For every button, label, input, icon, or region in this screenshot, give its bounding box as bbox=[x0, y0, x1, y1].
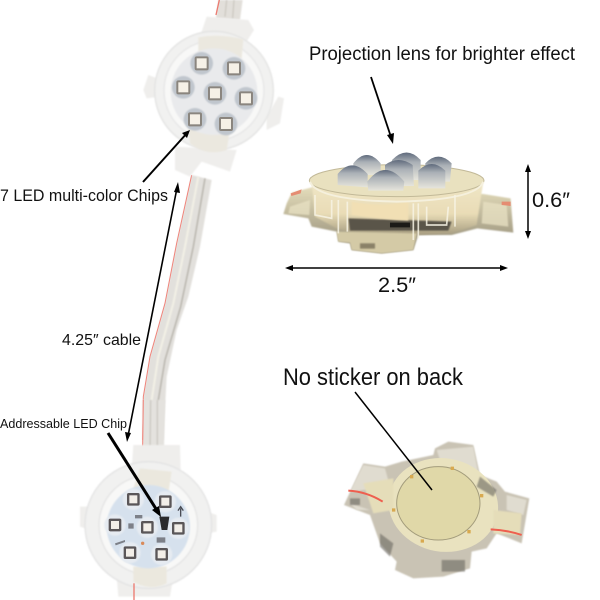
cable: ribbon between modules bbox=[143, 175, 212, 440]
photo: bottom LED module bbox=[80, 400, 217, 600]
module: beige board strips bbox=[132, 468, 172, 587]
side: base outline with flanges bbox=[283, 187, 513, 253]
LED chips bbox=[172, 52, 257, 135]
cable: top stub bbox=[216, 0, 243, 20]
side: housing ribs bbox=[315, 195, 455, 240]
addressable chip bbox=[159, 517, 169, 530]
label: addressable chip: Addressable LED Chip bbox=[0, 416, 127, 431]
small parts on board bbox=[115, 515, 165, 545]
label: LED chips: 7 LED multi-color Chips bbox=[0, 186, 168, 205]
back: dots bbox=[392, 467, 483, 543]
side: base front bbox=[337, 232, 417, 253]
back: clear housing outline bbox=[344, 442, 529, 578]
arrow: double-headed cable length bbox=[125, 182, 180, 442]
back: dark housing patches bbox=[350, 477, 497, 572]
arrow: height dimension bbox=[525, 164, 531, 239]
side: body bbox=[312, 182, 483, 235]
label: width: 2.5″ bbox=[378, 274, 417, 297]
side: top disc bbox=[309, 165, 484, 197]
arrow: addressable chip pointer bbox=[108, 433, 161, 517]
module: clear round housing bbox=[155, 31, 273, 150]
arrow: no sticker pointer bbox=[355, 392, 432, 490]
label: cable length: 4.25″ cable bbox=[62, 332, 141, 349]
module: clear round housing bbox=[85, 462, 212, 588]
module: housing tabs bbox=[143, 17, 284, 177]
cable: entry into bottom module bbox=[143, 400, 165, 450]
side: orange cream band bbox=[352, 202, 408, 221]
photo: back view of module bbox=[344, 442, 529, 578]
label: projection lens: Projection lens for brighter effect bbox=[309, 44, 576, 65]
side: flange glints bbox=[288, 200, 508, 227]
label: height: 0.6″ bbox=[532, 189, 571, 212]
back: cream disc base bbox=[381, 449, 506, 560]
label: no sticker: No sticker on back bbox=[283, 364, 464, 391]
arrow: 7 LED chips pointer bbox=[143, 130, 190, 182]
board direction mark bbox=[178, 507, 183, 517]
side: dark interior bbox=[348, 218, 452, 231]
back: round centre plate bbox=[397, 467, 480, 540]
side: projection lenses bbox=[338, 152, 452, 191]
LED chips bbox=[104, 489, 189, 565]
photo: side view of module with lenses bbox=[283, 152, 513, 253]
cable: exit stub bbox=[132, 583, 136, 600]
back: red wire marks bbox=[348, 491, 522, 535]
back: lighter clear patches bbox=[350, 447, 527, 515]
photo: top LED module bbox=[143, 17, 284, 177]
module: beige board strips bbox=[188, 36, 243, 152]
arrow: width dimension bbox=[285, 265, 508, 271]
module: circuit board bbox=[171, 48, 257, 135]
module: blue circuit board bbox=[107, 485, 190, 568]
module: housing tabs bbox=[80, 445, 217, 597]
arrow: projection lens pointer bbox=[371, 77, 394, 144]
